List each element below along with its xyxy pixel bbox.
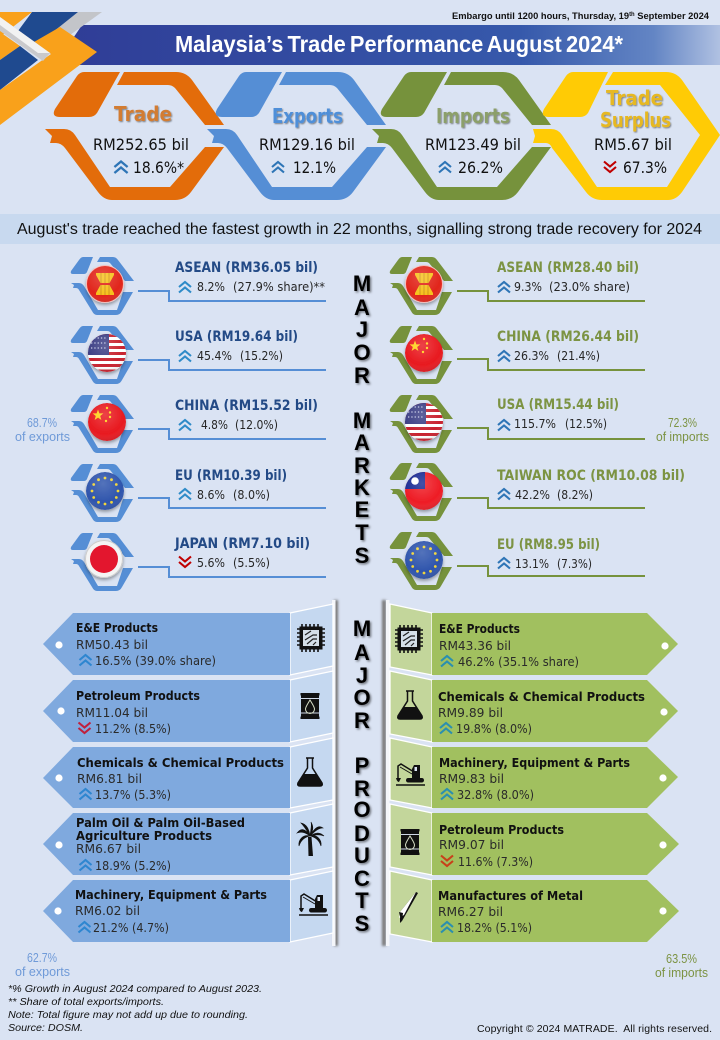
heading: trade: Trade	[114, 102, 172, 126]
vertical heading: major markets: E	[355, 497, 369, 522]
panel: exports	[207, 72, 386, 200]
market: USA exports: (15.2%)	[240, 348, 283, 363]
growth: trade: 18.6%*	[133, 158, 184, 177]
vertical heading: major markets: S	[355, 543, 369, 568]
market: Japan exports: (5.5%)	[233, 555, 270, 570]
growth arrow	[114, 162, 128, 173]
market: ASEAN exports: ASEAN (RM36.05 bil)	[175, 260, 318, 276]
product: E&E exports	[43, 604, 333, 675]
market: USA imports: 115.7%	[514, 416, 556, 431]
market: EU imports: (7.3%)	[557, 556, 592, 571]
product: E&E exports: E&E Products	[76, 620, 158, 635]
market: ASEAN imports: ASEAN (RM28.40 bil)	[497, 260, 639, 276]
value: exports: RM129.16 bil	[259, 135, 355, 154]
embargo note: th	[629, 12, 635, 18]
market: ASEAN exports	[71, 257, 326, 315]
market: Taiwan imports: (8.2%)	[557, 487, 593, 502]
panel: major export markets	[71, 257, 326, 591]
product: palm oil exports	[43, 804, 333, 875]
product: machinery imports: 32.8% (8.0%)	[457, 787, 534, 802]
share callout: markets exports	[15, 415, 70, 444]
product: chemicals imports: 19.8% (8.0%)	[456, 721, 532, 736]
market: EU imports: 13.1%	[515, 556, 549, 571]
growth: imports: 26.2%	[458, 158, 503, 177]
product: chemicals exports: 13.7% (5.3%)	[95, 787, 171, 802]
vertical heading: major products: J	[356, 663, 368, 688]
panel: trade surplus	[533, 72, 720, 200]
market: Japan exports: 5.6%	[197, 555, 225, 570]
growth arrow	[272, 162, 284, 172]
product: chemicals exports: RM6.81 bil	[77, 771, 142, 786]
product: chemicals exports: Chemicals & Chemical Products	[77, 755, 284, 770]
vertical heading: major products: T	[355, 888, 369, 913]
panel: major import products	[390, 604, 679, 942]
footnotes: *% Growth in August 2024 compared to August 2023.	[8, 983, 262, 995]
hexagon frame: trade	[45, 72, 224, 200]
market: China imports	[390, 326, 645, 384]
market: ASEAN imports	[390, 257, 645, 315]
product: petroleum imports	[390, 804, 679, 875]
heading: trade surplus: Surplus	[600, 108, 671, 132]
market: USA imports: (12.5%)	[565, 416, 607, 431]
market: EU exports: (8.0%)	[233, 487, 270, 502]
value: trade: RM252.65 bil	[93, 135, 189, 154]
product: chemicals imports	[390, 671, 678, 742]
market: EU exports: 8.6%	[197, 487, 225, 502]
product: machinery exports	[43, 871, 333, 942]
product: metal imports: Manufactures of Metal	[438, 888, 583, 903]
vertical heading: major markets: T	[355, 520, 369, 545]
product: palm oil exports: Palm Oil & Palm Oil-Based	[76, 815, 245, 830]
market: USA exports: USA (RM19.64 bil)	[175, 329, 298, 345]
vertical heading: major products: O	[353, 685, 371, 710]
panel: imports	[372, 72, 551, 200]
center dividers	[332, 600, 390, 946]
vertical heading: major markets: A	[354, 430, 370, 455]
market: USA exports	[71, 326, 326, 384]
product: palm oil exports: RM6.67 bil	[76, 841, 141, 856]
panel: trade	[45, 72, 224, 200]
product: machinery imports: RM9.83 bil	[439, 771, 504, 786]
share callout: products imports: 63.5%	[666, 951, 697, 966]
vertical heading: major markets: M	[353, 271, 371, 296]
vertical heading: major products: M	[353, 616, 371, 641]
product: chemicals imports: Chemicals & Chemical Products	[438, 689, 645, 704]
product: petroleum exports: Petroleum Products	[76, 688, 200, 703]
market: China exports: (12.0%)	[235, 417, 278, 432]
market: EU exports	[71, 464, 326, 522]
market: China imports: 26.3%	[514, 348, 549, 363]
vertical heading: major products: U	[354, 843, 370, 868]
growth: surplus: 67.3%	[623, 158, 667, 177]
market: ASEAN exports: 8.2%	[197, 279, 225, 294]
product: metal imports: 18.2% (5.1%)	[457, 920, 532, 935]
title banner	[55, 25, 720, 65]
vertical heading: major markets	[353, 271, 371, 568]
product: machinery exports: RM6.02 bil	[75, 903, 140, 918]
vertical heading: major markets: J	[356, 317, 368, 342]
heading: trade surplus	[600, 86, 671, 132]
share callout: markets imports	[656, 415, 709, 444]
footnotes: Source: DOSM.	[8, 1022, 83, 1034]
embargo note: September 2024	[635, 11, 710, 22]
footnotes: ** Share of total exports/imports.	[8, 996, 164, 1008]
share callout: products exports: of exports	[15, 964, 70, 979]
vertical heading: major markets: M	[353, 408, 371, 433]
share callout: markets exports: of exports	[15, 429, 70, 444]
product: E&E exports: 16.5% (39.0% share)	[95, 653, 216, 668]
market: EU exports: EU (RM10.39 bil)	[175, 468, 287, 484]
market: EU imports: EU (RM8.95 bil)	[497, 537, 600, 553]
product: E&E imports: RM43.36 bil	[439, 638, 511, 653]
vertical heading: major products: P	[355, 753, 369, 778]
vertical heading: major products: S	[355, 911, 369, 936]
share callout: products exports: 62.7%	[27, 950, 57, 965]
panel: major import markets	[390, 257, 685, 590]
share callout: markets imports: 72.3%	[668, 415, 697, 430]
vertical heading: major products: A	[354, 640, 370, 665]
vertical heading: major markets: K	[354, 475, 370, 500]
market: China exports: 4.8%	[201, 417, 228, 432]
market: USA imports: USA (RM15.44 bil)	[497, 397, 619, 413]
product: chemicals exports	[43, 738, 333, 808]
market: Japan exports: JAPAN (RM7.10 bil)	[174, 536, 310, 552]
growth arrow	[439, 162, 451, 172]
hexagon frame: imports	[372, 72, 551, 200]
product: E&E imports	[390, 604, 678, 675]
vertical heading: major products: C	[354, 866, 370, 891]
market: China exports	[71, 395, 326, 453]
market: ASEAN imports: 9.3%	[514, 279, 542, 294]
hexagon frame: surplus	[533, 72, 720, 200]
product: E&E imports: 46.2% (35.1% share)	[458, 654, 579, 669]
vertical heading: major markets: O	[353, 340, 371, 365]
heading: trade surplus: Trade	[606, 86, 663, 110]
vertical heading: major markets: R	[354, 363, 370, 388]
product: machinery exports: 21.2% (4.7%)	[93, 920, 169, 935]
product: metal imports: RM6.27 bil	[438, 904, 503, 919]
market: China imports: CHINA (RM26.44 bil)	[497, 329, 639, 345]
market: Japan exports	[71, 533, 326, 591]
product: metal imports	[390, 871, 679, 942]
product: palm oil exports: Agriculture Products	[76, 828, 212, 843]
vertical heading: major products: R	[354, 708, 370, 733]
product: E&E exports: RM50.43 bil	[76, 637, 148, 652]
headline band	[0, 214, 720, 244]
product: E&E imports: E&E Products	[439, 621, 520, 636]
share callout: markets exports: 68.7%	[27, 415, 57, 430]
embargo note: Embargo until 1200 hours, Thursday, 19	[452, 11, 632, 22]
product: machinery exports: Machinery, Equipment & Parts	[75, 887, 267, 902]
product: machinery imports	[390, 738, 678, 808]
share callout: products imports: of imports	[655, 965, 708, 980]
product: machinery imports: Machinery, Equipment & Parts	[439, 755, 630, 770]
logo: chevron corner graphic	[0, 12, 102, 125]
footnotes: Note: Total figure may not add up due to rounding.	[8, 1009, 248, 1021]
market: USA exports: 45.4%	[197, 348, 232, 363]
market: Taiwan imports: TAIWAN ROC (RM10.08 bil)	[497, 468, 685, 484]
market: USA imports	[390, 395, 645, 453]
growth: exports: 12.1%	[293, 158, 336, 177]
product: petroleum imports: 11.6% (7.3%)	[458, 854, 533, 869]
decline arrow	[604, 162, 616, 172]
share callout: products exports	[15, 950, 70, 979]
product: petroleum exports: 11.2% (8.5%)	[95, 721, 171, 736]
market: Taiwan imports	[390, 463, 685, 521]
value: surplus: RM5.67 bil	[594, 135, 672, 154]
panel: major export products	[43, 604, 333, 942]
headline band: August's trade reached the fastest growth in 22 months, signalling strong trade recovery for 2024	[17, 221, 702, 238]
heading: imports: Imports	[436, 104, 510, 128]
product: chemicals imports: RM9.89 bil	[438, 705, 503, 720]
market: China imports: (21.4%)	[557, 348, 600, 363]
market: ASEAN exports: (27.9% share)**	[233, 279, 325, 294]
value: imports: RM123.49 bil	[425, 135, 521, 154]
footnotes	[8, 983, 262, 1034]
vertical heading: major products: O	[353, 797, 371, 822]
share callout: markets imports: of imports	[656, 429, 709, 444]
market: China exports: CHINA (RM15.52 bil)	[175, 398, 318, 414]
hexagon frame: exports	[207, 72, 386, 200]
market: ASEAN imports: (23.0% share)	[549, 279, 630, 294]
product: petroleum exports	[43, 671, 333, 742]
heading: exports: Exports	[272, 104, 343, 128]
product: petroleum imports: RM9.07 bil	[439, 837, 504, 852]
copyright: Copyright © 2024 MATRADE. All rights reserved.	[477, 1023, 712, 1035]
product: petroleum exports: RM11.04 bil	[76, 705, 148, 720]
vertical heading: major markets: A	[354, 295, 370, 320]
share callout: products imports	[655, 951, 708, 980]
product: petroleum imports: Petroleum Products	[439, 822, 564, 837]
market: Taiwan imports: 42.2%	[515, 487, 550, 502]
product: palm oil exports: 18.9% (5.2%)	[95, 858, 171, 873]
title: Malaysia’s Trade Performance August 2024*	[175, 31, 623, 57]
vertical heading: major products: R	[354, 776, 370, 801]
vertical heading: major products: D	[354, 821, 370, 846]
vertical heading: major markets: R	[354, 453, 370, 478]
market: EU imports	[390, 532, 645, 590]
vertical heading: major products	[353, 616, 371, 936]
